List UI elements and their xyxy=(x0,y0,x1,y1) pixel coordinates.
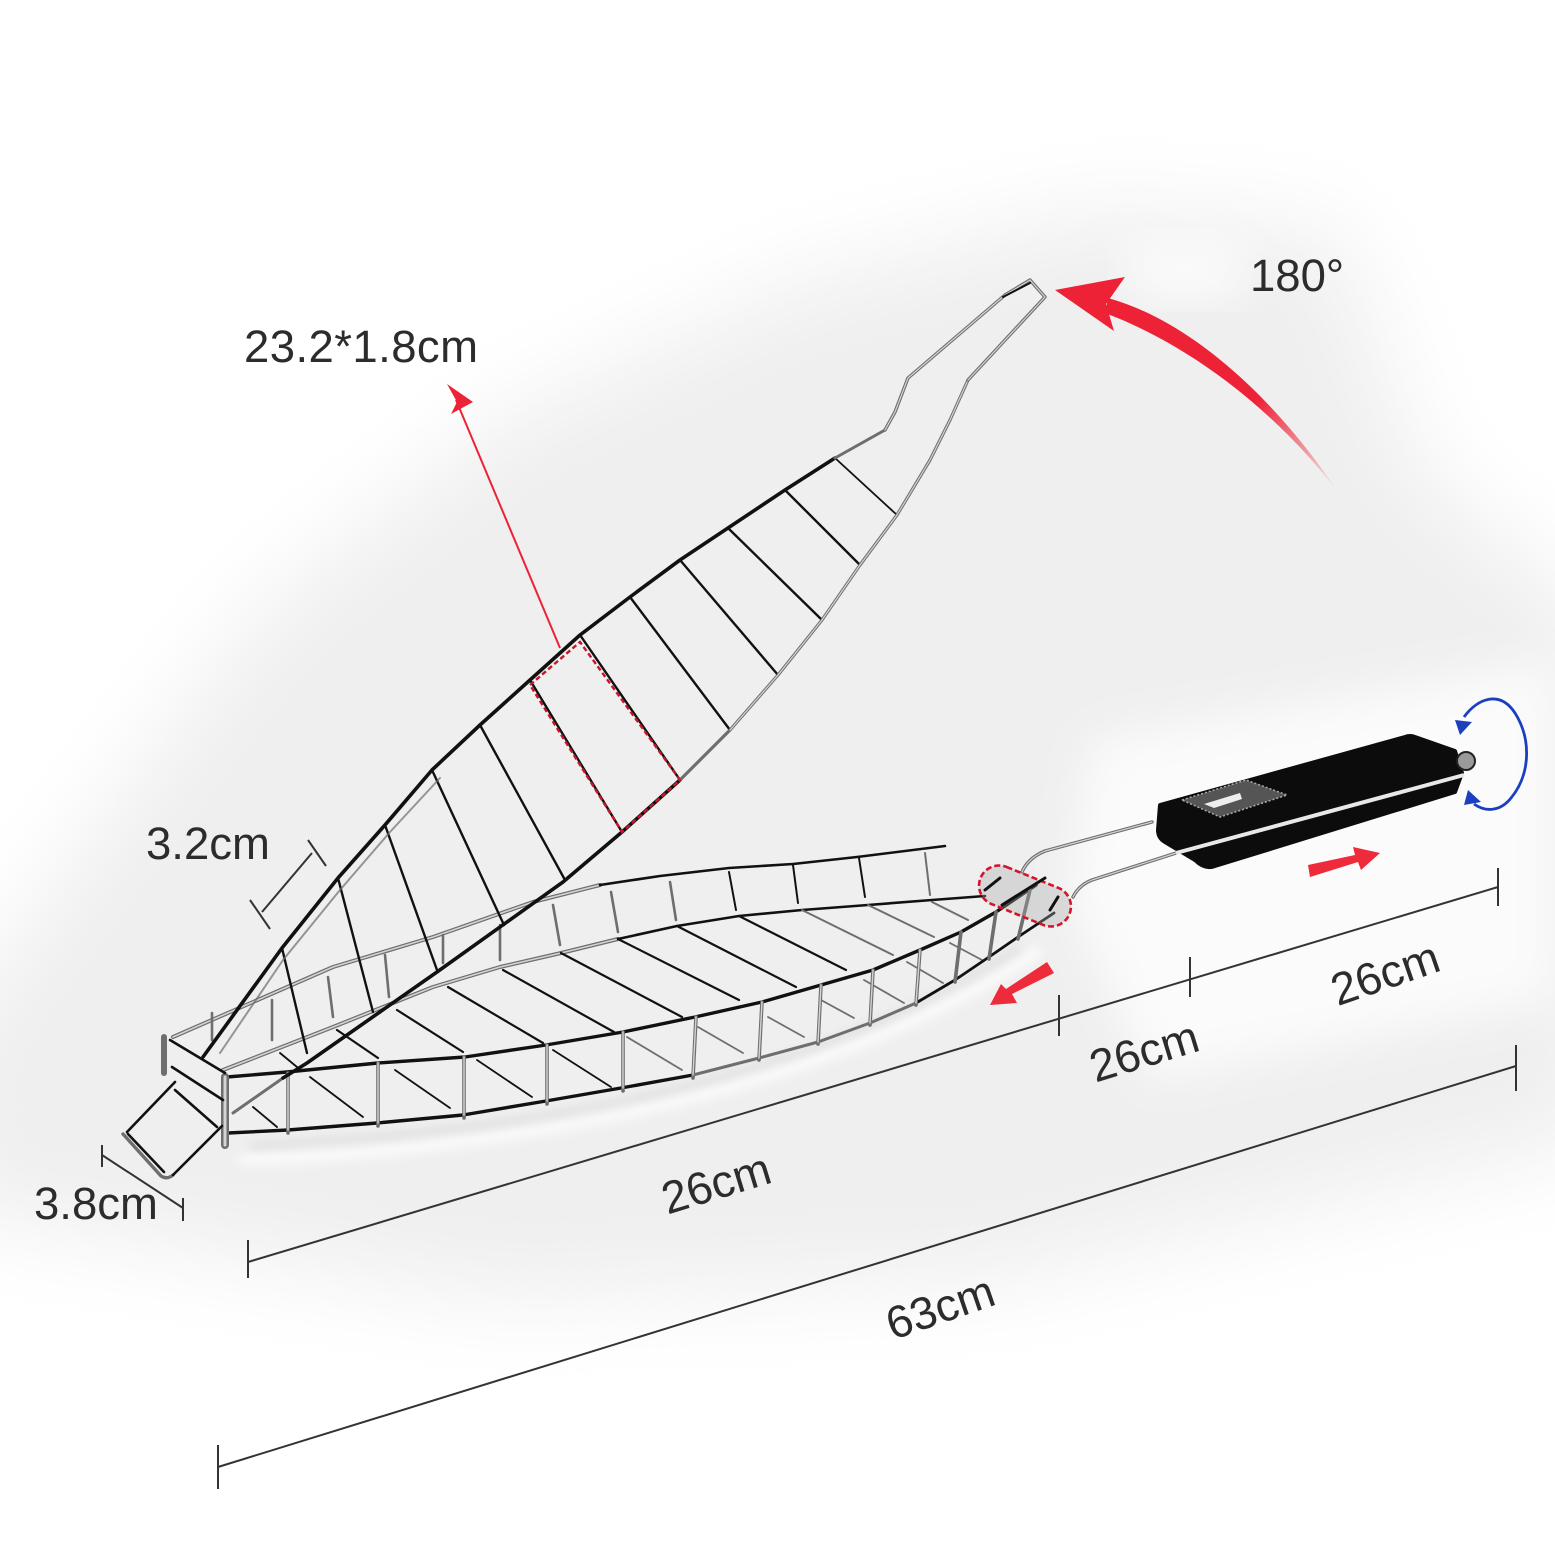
label: 26cm left: 26cm xyxy=(655,1143,777,1224)
red arrow: left xyxy=(990,962,1054,1005)
dimension line: 63cm: 63cm xyxy=(879,1265,1001,1350)
handle wires xyxy=(1022,822,1176,897)
lid handle loop xyxy=(885,280,1045,430)
black handle xyxy=(1158,736,1475,867)
dimension: 3.8cm xyxy=(34,1145,183,1229)
front rim wires xyxy=(227,885,1054,1133)
red arrow: right xyxy=(1308,847,1380,877)
back rim wires xyxy=(173,846,985,1070)
upper wire lid xyxy=(203,280,1045,1113)
dimension: 3.2cm xyxy=(146,818,326,929)
lower basket xyxy=(123,846,1054,1178)
label: 180 degrees: 180° xyxy=(1250,250,1344,301)
label: rib size: 23.2*1.8cm xyxy=(244,321,478,372)
handle label xyxy=(1182,780,1287,817)
handle bright wire xyxy=(1176,775,1464,853)
red dashed highlight: hinge clip xyxy=(973,859,1077,933)
dimension line: 26cm sections xyxy=(248,868,1498,1278)
front uprights xyxy=(288,890,1030,1133)
blue rotation arrow xyxy=(1455,699,1527,809)
dimension: 3.2cm: 3.2cm xyxy=(146,818,270,869)
hinge end frame and latch handle xyxy=(123,1037,225,1178)
lid upper edge xyxy=(203,430,885,1057)
floor ribs xyxy=(253,902,982,1127)
dimension line: 63cm xyxy=(218,1045,1516,1489)
arrow: rib spacing leader xyxy=(447,384,560,648)
red 180 degree arrow xyxy=(1055,277,1338,492)
lid ribs xyxy=(282,458,897,1053)
back uprights xyxy=(212,853,930,1040)
background: soft grey backdrop xyxy=(0,210,1555,1300)
label: 26cm right: 26cm xyxy=(1324,931,1446,1016)
handle end cap xyxy=(1457,752,1475,770)
lid lower edge xyxy=(233,380,968,1113)
label: 26cm middle: 26cm xyxy=(1083,1011,1205,1092)
dimension: 3.8cm: 3.8cm xyxy=(34,1178,158,1229)
red dashed highlight: rib spacing xyxy=(530,642,680,832)
